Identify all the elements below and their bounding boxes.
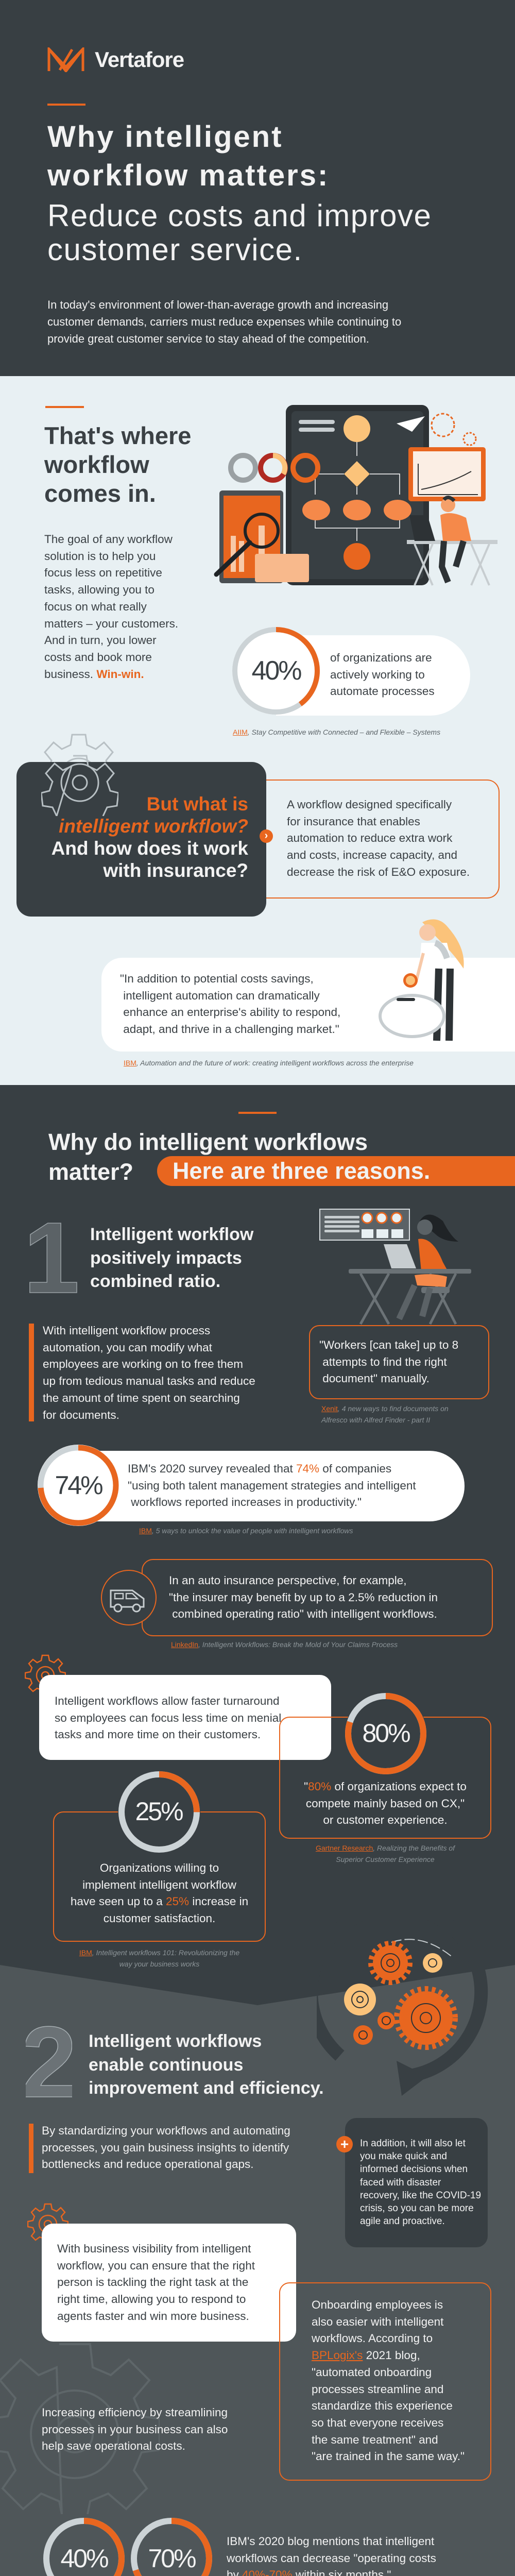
text: increasing efficiency <box>42 2404 228 2455</box>
text: By standardizing your workflows and automating <box>42 2124 290 2137</box>
source: AIIM: AIIM, Stay Competitive with Connected – and Flexible – Systems <box>233 728 440 736</box>
background: reason 2 gray <box>0 1965 515 2576</box>
outline box: onboarding: workflows. According to <box>312 2332 433 2345</box>
stat: 74% productivity: "using both talent management strategies and intelligent <box>128 1479 416 1492</box>
stat: 25% satisfaction: Organizations willing to <box>100 1861 219 1874</box>
outline box: onboarding: processes streamline and <box>312 2383 443 2396</box>
intro paragraph: provide great customer service to stay ahead of the competition. <box>47 332 369 345</box>
definition outline box <box>266 779 500 899</box>
heading reason 2: enable continuous <box>89 2055 243 2074</box>
icon: orange gear <box>25 1655 66 1692</box>
stat: 40% automate: actively working to <box>330 668 425 681</box>
text: processes, you gain business insights to identify <box>42 2141 289 2154</box>
chevron icon <box>260 829 273 843</box>
callout: auto insurance: "the insurer may benefit by up to a 2.5% reduction in <box>169 1591 438 1604</box>
outline box: onboarding: Onboarding employees is <box>312 2298 443 2311</box>
source: Xenit: Alfresco with Alfred Finder - part II <box>321 1416 430 1424</box>
panel: what is intelligent workflow <box>16 755 500 917</box>
stat: 25% satisfaction: customer satisfaction. <box>104 1912 215 1925</box>
outline box: onboarding: the same treatment" and <box>312 2433 438 2446</box>
stat: 40% and 70%: 70% <box>148 2544 195 2573</box>
body: goal of workflow: The goal of any workflow <box>44 533 173 546</box>
definition text: and costs, increase capacity, and <box>287 849 457 861</box>
outline box: onboarding: so that everyone receives <box>312 2416 443 2429</box>
callout: auto insurance <box>101 1559 493 1636</box>
stat: 40% automate: automate processes <box>330 685 435 698</box>
stat: 74% productivity <box>38 1445 465 1526</box>
heading reason 1: Intelligent workflow <box>90 1225 253 1244</box>
question heading: But what is <box>147 793 248 815</box>
illustration: woman with piggy bank <box>379 919 464 1041</box>
source: IBM automation: IBM, Automation and the future of work: creating intelligent workflows across the enterprise <box>124 1059 414 1067</box>
pill <box>78 1451 465 1521</box>
donut 74% <box>38 1445 118 1526</box>
stat: 40% and 70%: IBM's 2020 blog mentions that intelligent <box>227 2535 434 2548</box>
heading: why do intelligent workflows matter: matter? <box>48 1159 133 1185</box>
text: increasing efficiency: help save operational costs. <box>42 2439 185 2452</box>
text: employees are working on to free them <box>43 1358 243 1370</box>
source: Xenit: Xenit, 4 new ways to find documents on <box>321 1404 449 1413</box>
dark box: disaster recovery: In addition, it will also let <box>360 2138 466 2149</box>
quote box: workers attempts: "Workers [can take] up to 8 <box>319 1338 458 1351</box>
text: increasing efficiency: processes in your business can also <box>42 2423 228 2436</box>
stat: 40% and 70% <box>43 2517 465 2576</box>
body: goal of workflow: And in turn, you lower <box>44 634 157 647</box>
stat: 25% satisfaction: 25% <box>135 1797 182 1826</box>
outline box: onboarding: "automated onboarding <box>312 2366 432 2379</box>
icon: plus: + <box>340 2136 349 2152</box>
text: With intelligent workflow process <box>43 1324 210 1337</box>
accent line <box>45 406 84 408</box>
white box: faster turnaround: Intelligent workflows allow faster turnaround <box>55 1694 279 1707</box>
logo: Vertafore <box>95 47 184 72</box>
logo <box>47 47 184 72</box>
stat: 80% CX: compete mainly based on CX," <box>306 1797 465 1810</box>
dark box: disaster recovery: you make quick and <box>360 2151 447 2162</box>
quote: IBM intelligent automation <box>101 958 515 1052</box>
body: goal of workflow: tasks, allowing you to <box>44 583 154 596</box>
heading: that's where workflow comes in <box>44 422 191 507</box>
dark box: disaster recovery: agile and proactive. <box>360 2216 445 2227</box>
background: light section <box>0 376 515 1085</box>
outline box: onboarding: also easier with intelligent <box>312 2315 443 2328</box>
question heading: intelligent workflow? <box>59 816 248 837</box>
heading reason 2: Intelligent workflows <box>89 2031 262 2051</box>
dark box: disaster recovery: crisis, so you can be more <box>360 2203 474 2214</box>
heading: that's where workflow comes in: That's where <box>44 422 191 449</box>
stat: 74% productivity: workflows reported increases in productivity." <box>131 1496 362 1509</box>
orange pill: three reasons: Here are three reasons. <box>173 1158 430 1184</box>
source: IBM 101: way your business works <box>119 1960 199 1968</box>
source: Xenit <box>321 1404 449 1424</box>
background: header dark <box>0 0 515 376</box>
dark box: disaster recovery: faced with disaster <box>360 2177 441 2188</box>
white box: business visibility: person is tackling the right task at the <box>57 2276 248 2289</box>
heading: why do intelligent workflows matter <box>48 1129 515 1186</box>
body: goal of workflow: focus on what really <box>44 600 147 613</box>
outline box: onboarding <box>279 2282 491 2481</box>
chevron icon: › <box>265 830 268 841</box>
paragraph reason 1 <box>29 1324 34 1421</box>
heading reason 2: improvement and efficiency. <box>89 2078 324 2098</box>
heading reason 1 <box>90 1225 253 1291</box>
illustration: gears with circular arrow <box>317 1939 488 2096</box>
stat: 80% CX: or customer experience. <box>323 1814 448 1826</box>
dark box: disaster recovery: informed decisions when <box>360 2164 468 2175</box>
quote box: workers attempts: attempts to find the right <box>322 1355 447 1368</box>
body: goal of workflow: costs and book more <box>44 651 152 664</box>
dark question box <box>16 762 266 917</box>
heading reason 2 <box>89 2031 324 2098</box>
source: IBM 101 <box>79 1948 239 1968</box>
body: goal of workflow <box>44 533 178 681</box>
definition text: decrease the risk of E&O exposure. <box>287 866 470 878</box>
background: reasons dark <box>0 1085 515 1966</box>
title: customer service. <box>47 232 303 267</box>
gear decor <box>44 734 114 762</box>
definition text: for insurance that enables <box>287 815 420 828</box>
stat: 40% automate <box>232 627 470 716</box>
quote: IBM intelligent automation: "In addition to potential costs savings, <box>120 972 314 985</box>
heading reason 1: combined ratio. <box>90 1272 220 1291</box>
stat: 40% automate: 40% <box>251 656 301 686</box>
donut 40% <box>43 2517 126 2576</box>
text: automation, you can modify what <box>43 1341 212 1354</box>
paragraph reason 2 <box>29 2124 33 2173</box>
stat: 74% productivity: 74% <box>55 1471 102 1500</box>
question heading: with insurance? <box>103 860 248 881</box>
source: Gartner: Superior Customer Experience <box>336 1855 435 1863</box>
donut 40% <box>232 627 320 715</box>
stat: 80% CX <box>279 1693 491 1839</box>
donut 25% <box>118 1771 200 1853</box>
stat: 25% satisfaction <box>53 1771 266 1942</box>
question heading: And how does it work <box>52 838 248 859</box>
text: bottlenecks and reduce operational gaps. <box>42 2158 254 2171</box>
orange pill: three reasons <box>157 1156 515 1186</box>
definition text: A workflow designed specifically <box>287 798 452 811</box>
icon: plus <box>336 2136 353 2153</box>
heading: that's where workflow comes in: workflow <box>44 451 149 478</box>
title <box>47 120 432 267</box>
title: Reduce costs and improve <box>47 198 432 233</box>
stat: 25% satisfaction: implement intelligent workflow <box>82 1878 236 1891</box>
stat: 40% and 70%: workflows can decrease "operating costs <box>227 2552 436 2565</box>
stat: 80% CX: 80% <box>362 1719 409 1748</box>
title: workflow matters: <box>47 159 329 192</box>
text: the amount of time spent on searching <box>43 1392 240 1404</box>
pill <box>276 635 470 716</box>
source: IBM 5 ways: IBM, 5 ways to unlock the value of people with intelligent workflows <box>139 1527 353 1535</box>
accent line <box>238 1112 277 1114</box>
white box: faster turnaround: so employees can focus less time on menial <box>55 1711 281 1724</box>
text: up from tedious manual tasks and reduce <box>43 1375 255 1387</box>
source: Gartner: Gartner Research, Realizing the Benefits of <box>316 1844 455 1852</box>
stat: 74% productivity: IBM's 2020 survey revealed that 74% of companies <box>128 1462 391 1475</box>
illustration: workflow tablet <box>214 405 497 586</box>
source: IBM 101: IBM, Intelligent workflows 101: Revolutionizing the <box>79 1948 239 1957</box>
definition text: automation to reduce extra work <box>287 832 452 844</box>
white box: business visibility: right time, allowing you to respond to <box>57 2293 246 2306</box>
stat: 40% and 70%: 40% <box>60 2544 108 2573</box>
intro paragraph: In today's environment of lower-than-average growth and increasing <box>47 298 388 311</box>
outline box: onboarding: standardize this experience <box>312 2399 453 2412</box>
source: LinkedIn: LinkedIn, Intelligent Workflows: Break the Mold of Your Claims Process <box>171 1640 398 1649</box>
white box: business visibility: workflow, you can ensure that the right <box>57 2259 255 2272</box>
icon: van <box>101 1570 157 1625</box>
white box: faster turnaround <box>39 1675 331 1760</box>
outline box: onboarding: BPLogix's 2021 blog, <box>312 2349 420 2362</box>
definition text <box>287 798 470 878</box>
text: for documents. <box>43 1409 119 1421</box>
quote box: workers attempts: document" manually. <box>322 1372 430 1385</box>
donut 70% <box>130 2517 214 2576</box>
stat: 40% automate: of organizations are <box>330 651 432 664</box>
callout: auto insurance: In an auto insurance perspective, for example, <box>169 1574 407 1587</box>
body: goal of workflow: solution is to help you <box>44 550 156 563</box>
text: increasing efficiency: Increasing efficiency by streamlining <box>42 2406 228 2419</box>
white box: faster turnaround: tasks and more time on their customers. <box>55 1728 261 1741</box>
body: goal of workflow: business. Win-win. <box>44 668 144 681</box>
source: Gartner <box>315 1844 455 1863</box>
heading: that's where workflow comes in: comes in. <box>44 480 156 507</box>
quote box: workers attempts <box>309 1325 489 1399</box>
dark box: disaster recovery <box>345 2118 488 2247</box>
intro paragraph <box>47 298 401 345</box>
white box: business visibility: agents faster and win more business. <box>57 2310 249 2323</box>
white box: business visibility <box>42 2224 296 2342</box>
outline box: onboarding: "are trained in the same way." <box>312 2450 465 2463</box>
illustration: woman at desk <box>319 1209 471 1325</box>
donut 80% <box>345 1693 426 1774</box>
icon: orange gear 2 <box>27 2203 68 2241</box>
stat: 80% CX: "80% of organizations expect to <box>304 1780 467 1793</box>
callout: auto insurance: combined operating ratio" with intelligent workflows. <box>172 1607 437 1620</box>
body: goal of workflow: matters – your customers. <box>44 617 178 630</box>
gear decor big gray <box>0 2343 160 2514</box>
gear outline in box <box>41 755 118 816</box>
heading reason 1: positively impacts <box>90 1248 242 1267</box>
title: Why intelligent <box>47 120 283 154</box>
quote: IBM intelligent automation: adapt, and thrive in a challenging market." <box>123 1023 339 1036</box>
question heading <box>52 793 248 881</box>
accent line <box>47 104 85 106</box>
quote: IBM intelligent automation: enhance an enterprise's ability to respond, <box>123 1006 340 1019</box>
stat: 25% satisfaction: have seen up to a 25% increase in <box>71 1895 248 1908</box>
intro paragraph: customer demands, carriers must reduce expenses while continuing to <box>47 315 401 328</box>
quote: IBM intelligent automation: intelligent automation can dramatically <box>123 989 320 1002</box>
white box: business visibility: With business visibility from intelligent <box>57 2242 251 2255</box>
dark box: disaster recovery: recovery, like the COVID-19 <box>360 2190 481 2201</box>
body: goal of workflow: focus less on repetitive <box>44 566 162 579</box>
heading: why do intelligent workflows matter: Why do intelligent workflows <box>48 1129 368 1155</box>
